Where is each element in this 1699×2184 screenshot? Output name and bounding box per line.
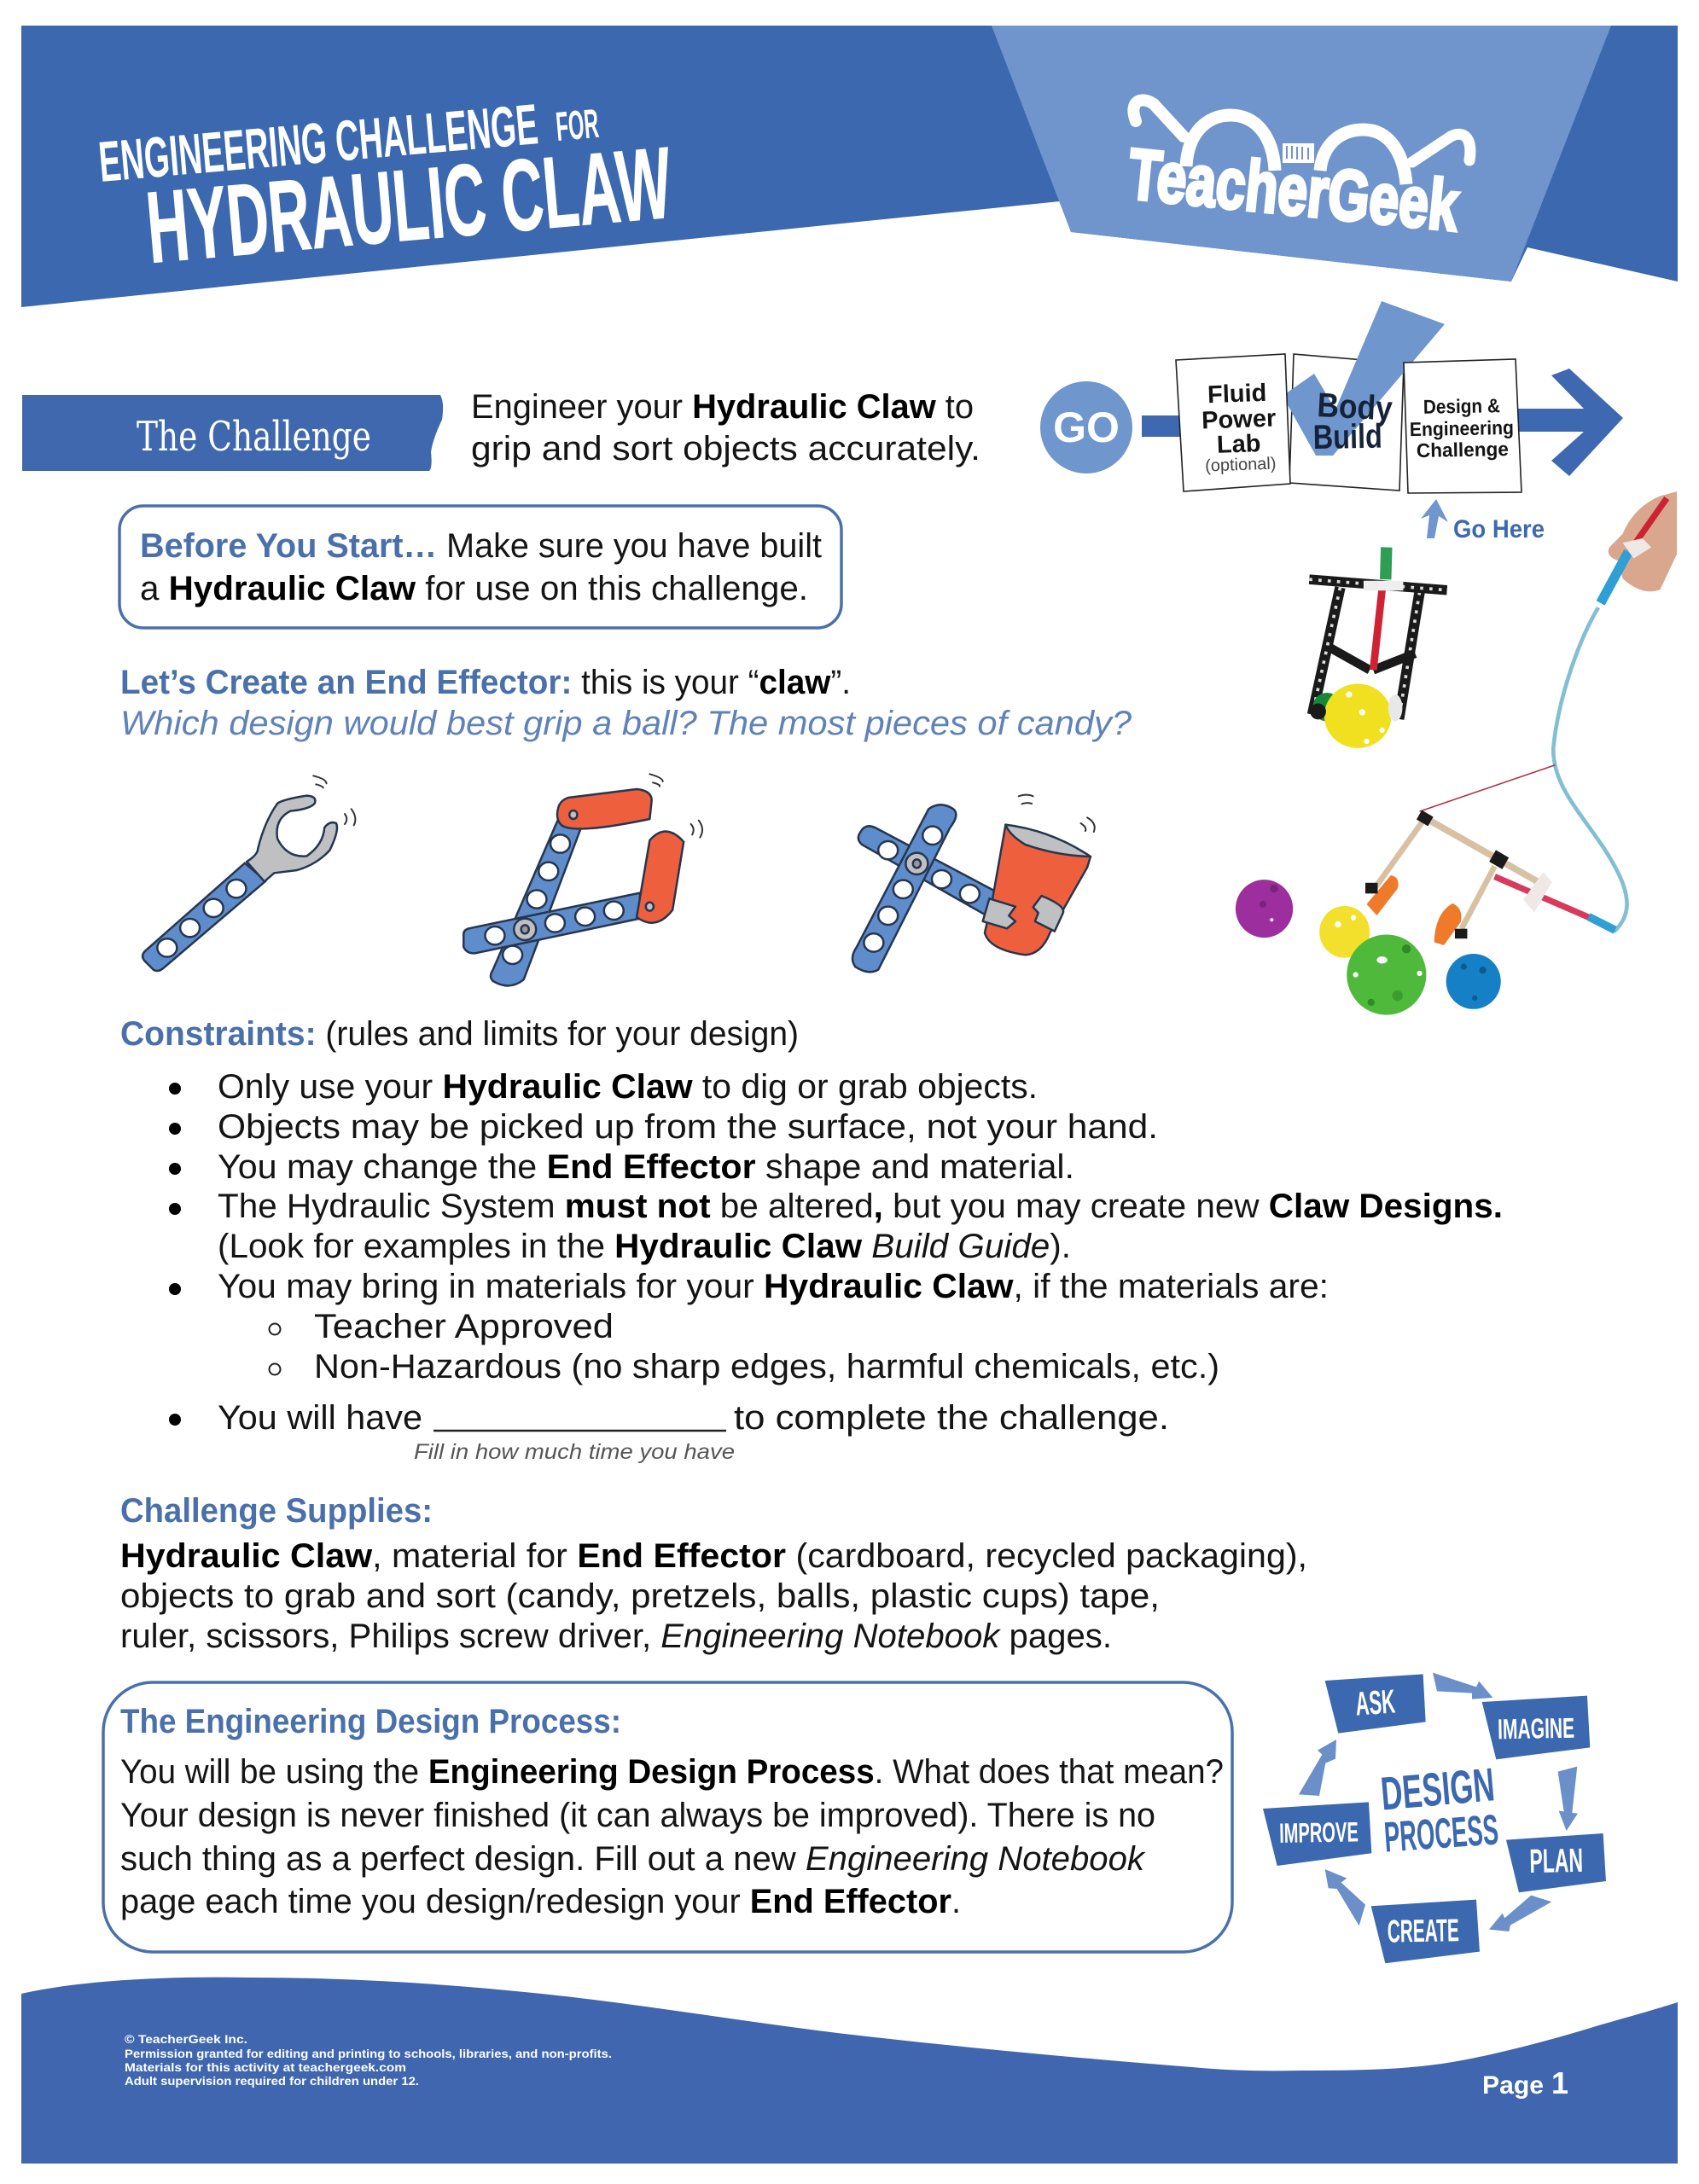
panel: the engineering design process: The Engineering Design Process: [120, 1703, 621, 1740]
text block: constraints [120, 1015, 1503, 1464]
arrow: go here [1421, 499, 1545, 543]
bullet list: Only use your Hydraulic Claw to dig or grab objects. [218, 1068, 1038, 1106]
arrow: output [1516, 369, 1623, 476]
photo: hydraulic claw with hand, tube and balls [1236, 491, 1677, 1015]
balls [1236, 880, 1293, 938]
label: design process: DESIGN [1379, 1757, 1497, 1821]
text block: before you start box: Before You Start… Make sure you have built [140, 527, 822, 565]
orange pads [1367, 875, 1399, 915]
box: fluid power lab: (optional) [1205, 455, 1277, 475]
panel: the engineering design process: page each time you design/redesign your End Effector. [120, 1883, 961, 1920]
panel: the engineering design process: Your design is never finished (it can always be improved). There is no [120, 1797, 1155, 1834]
title [96, 92, 676, 285]
bullet list: You will have [218, 1399, 422, 1437]
bullet list [169, 1068, 1503, 1464]
box: body build [1283, 301, 1445, 491]
bullet list: The Hydraulic System must not be altered, but you may create new Claw Designs. [218, 1188, 1503, 1225]
illustration: cup end effector [852, 795, 1095, 972]
flow diagram [1040, 301, 1623, 543]
syringe [1629, 498, 1667, 552]
logo: TeacherGeek [1125, 100, 1470, 246]
header banner [21, 26, 1678, 307]
box: fluid power lab: Power [1202, 404, 1277, 435]
step: imagine [1482, 1696, 1590, 1759]
illustration: cardboard pad end effector [463, 774, 702, 985]
logo: TeacherGeek: TeacherGeek [1125, 133, 1463, 246]
sticks [1424, 817, 1548, 887]
bullet list: Teacher Approved [314, 1308, 614, 1345]
text block: challenge supplies [120, 1492, 1307, 1655]
panel: the challenge tab: The Challenge [137, 413, 371, 461]
title: ENGINEERING CHALLENGE [96, 92, 540, 195]
panel: the engineering design process: such thing as a perfect design. Fill out a new Engineering Notebook [120, 1840, 1146, 1878]
bullet list: (Look for examples in the Hydraulic Claw Build Guide). [218, 1228, 1071, 1265]
label: design process: PROCESS [1382, 1805, 1500, 1862]
text block: challenge statement [471, 388, 980, 468]
heading: let's create an end effector [120, 664, 1132, 742]
text block: challenge supplies: objects to grab and sort (candy, pretzels, balls, plastic cups) tape, [120, 1577, 1160, 1615]
box: design and engineering challenge: Design & [1423, 394, 1500, 418]
diagram: design process cycle [1263, 1673, 1606, 1963]
text block: challenge statement: grip and sort objects accurately. [471, 430, 980, 468]
title: FOR [554, 102, 601, 150]
step: plan [1506, 1833, 1606, 1892]
bullet list: Non-Hazardous (no sharp edges, harmful chemicals, etc.) [314, 1348, 1219, 1385]
panel: the engineering design process: You will be using the Engineering Design Process. What does that mean? [120, 1753, 1224, 1791]
bullet list: You may change the End Effector shape and material. [218, 1148, 1074, 1186]
text block: challenge supplies: Challenge Supplies: [120, 1492, 433, 1530]
hand [1609, 491, 1677, 591]
title: HYDRAULIC CLAW [143, 126, 676, 285]
box: design and engineering challenge [1404, 359, 1522, 493]
bullet list: You may bring in materials for your Hydraulic Claw, if the materials are: [218, 1268, 1329, 1305]
lower syringe [1495, 876, 1590, 918]
box: design and engineering challenge: Challenge [1417, 438, 1509, 462]
page number: 1 [1551, 2065, 1568, 2100]
tube [1553, 607, 1627, 932]
step: imagine: IMAGINE [1498, 1713, 1574, 1745]
box: body build: Body [1317, 386, 1394, 428]
step: ask [1325, 1674, 1426, 1734]
arrow: go here: Go Here [1453, 515, 1545, 543]
label: design process [1379, 1757, 1500, 1862]
text block: before you start box [119, 506, 841, 628]
page number [1482, 2065, 1568, 2100]
box: design and engineering challenge: Engineering [1410, 416, 1514, 440]
arrows: cycle [1299, 1673, 1578, 1931]
box: body build: Build [1312, 418, 1382, 456]
text block: footer legal [125, 2033, 612, 2088]
step: plan: PLAN [1529, 1842, 1583, 1880]
text block: challenge statement: Engineer your Hydraulic Claw to [471, 388, 974, 426]
box: fluid power lab: Fluid [1207, 380, 1267, 409]
illustration: fork end effector [143, 775, 355, 971]
footer banner [21, 1978, 1678, 2164]
text block: footer legal: Permission granted for editing and printing to schools, libraries, and non-profits. [125, 2048, 612, 2060]
text block: challenge supplies: Hydraulic Claw, material for End Effector (cardboard, recycled packaging), [120, 1537, 1307, 1575]
step: improve: IMPROVE [1279, 1815, 1359, 1849]
page number: Page [1482, 2071, 1544, 2100]
icon: GO circle [1040, 381, 1132, 473]
text block: footer legal: Materials for this activity at teachergeek.com [125, 2061, 406, 2074]
step: improve [1263, 1802, 1371, 1866]
thread [1420, 765, 1555, 811]
text block: footer legal: Adult supervision required for children under 12. [125, 2075, 419, 2088]
box: fluid power lab [1176, 354, 1290, 491]
box: fluid power lab: Lab [1216, 430, 1261, 459]
heading: let's create an end effector: Let’s Create an End Effector: this is your “claw”. [120, 664, 851, 701]
text block: before you start box: a Hydraulic Claw for use on this challenge. [140, 570, 808, 607]
photo: hydraulic claw holding yellow ball [1309, 548, 1447, 748]
heading: let's create an end effector: Which design would best grip a ball? The most pieces of candy? [120, 705, 1132, 742]
step: create: CREATE [1387, 1912, 1459, 1949]
text block: challenge supplies: ruler, scissors, Philips screw driver, Engineering Notebook pages. [120, 1618, 1112, 1655]
heading: constraints: Constraints: (rules and limits for your design) [120, 1015, 799, 1053]
step: create [1371, 1900, 1480, 1963]
bullet list: Objects may be picked up from the surface, not your hand. [218, 1108, 1158, 1146]
bullet list: Fill in how much time you have [414, 1440, 735, 1464]
text block: footer legal: © TeacherGeek Inc. [125, 2033, 247, 2046]
arrow: start connector [1142, 415, 1181, 437]
panel: the challenge tab [22, 395, 443, 471]
step: ask: ASK [1354, 1682, 1397, 1723]
icon: GO circle: GO [1053, 404, 1120, 451]
bullet list: to complete the challenge. [734, 1399, 1169, 1437]
panel: the engineering design process [103, 1682, 1232, 1952]
